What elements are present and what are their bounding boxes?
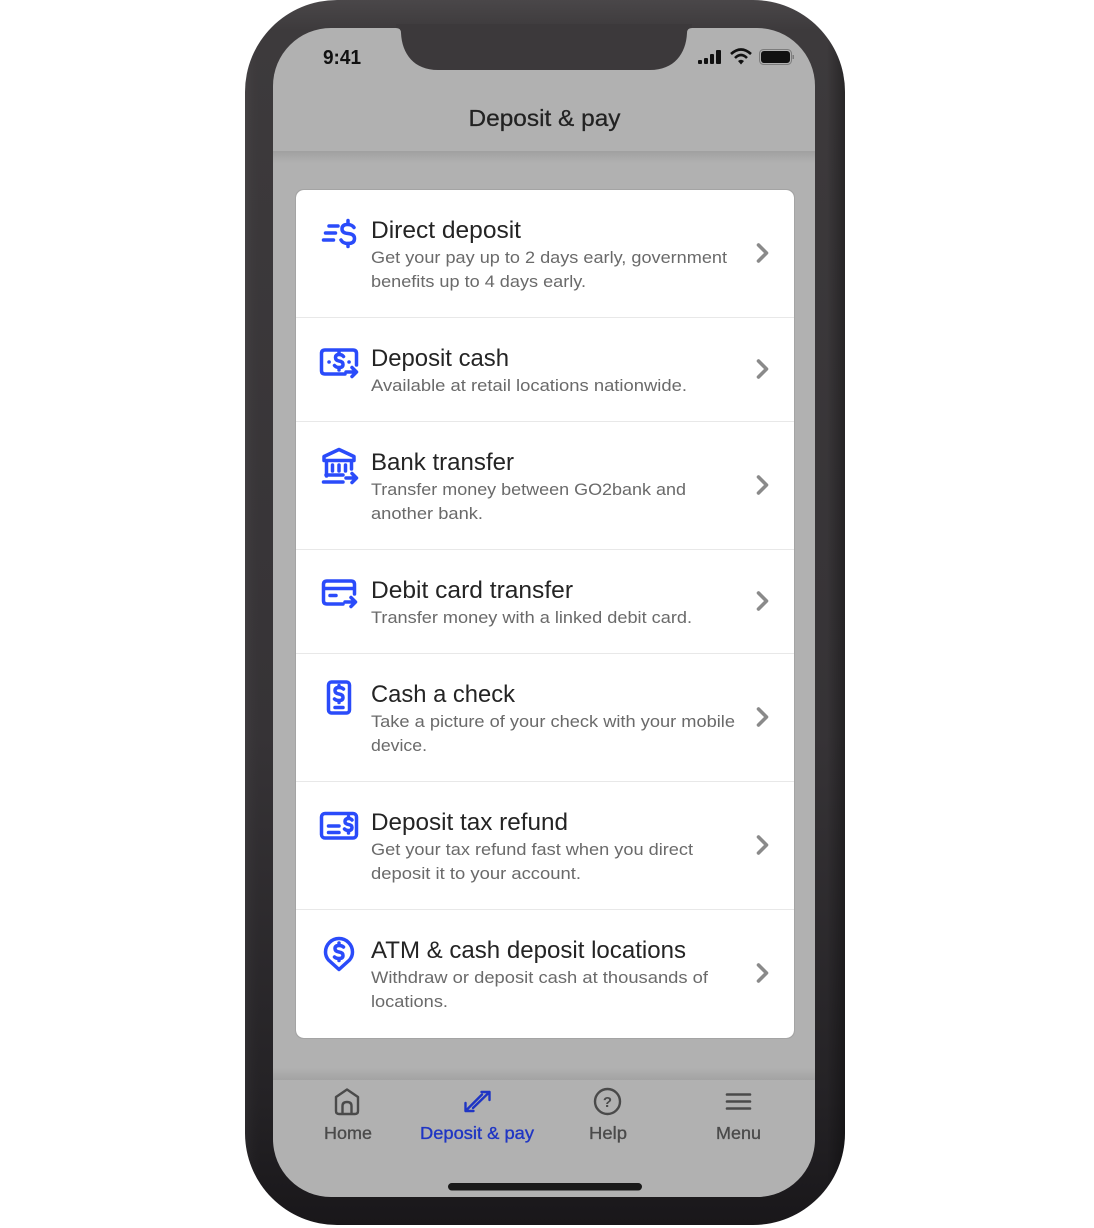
row: direct deposit: Direct deposit [371,217,521,244]
row: cash a check: device. [371,736,427,755]
panel: options card [296,190,794,1038]
row: atm locations: ATM & cash deposit locations [371,937,686,964]
nav: help [589,1089,627,1143]
nav: deposit and pay (active) [420,1092,534,1143]
chevron [758,361,766,377]
icon: phone with dollar [328,682,350,713]
phone screen [273,28,815,1197]
row: deposit tax refund: deposit it to your account. [371,864,581,883]
nav: menu: Menu [716,1123,761,1143]
row: deposit tax refund [322,809,766,883]
row: direct deposit: benefits up to 4 days early. [371,272,586,291]
status bar time: 9:41 [323,47,361,69]
row: atm locations: Withdraw or deposit cash at thousands of [371,968,708,987]
phone body [245,0,845,1225]
nav: help: ? [603,1094,612,1111]
row: debit card transfer: Transfer money with a linked debit card. [371,608,692,627]
nav: home: Home [324,1123,372,1143]
nav: deposit and pay (active): Deposit & pay [420,1123,534,1143]
row: direct deposit: Get your pay up to 2 days early, government [371,248,727,267]
row: debit card transfer [324,577,766,627]
row: deposit tax refund: Get your tax refund fast when you direct [371,840,693,859]
chevron [758,245,766,261]
icon: card with arrow [324,581,356,606]
row: deposit tax refund: Deposit tax refund [371,809,568,836]
row: deposit cash: Available at retail locations nationwide. [371,376,687,395]
chevron [758,593,766,609]
row: cash a check: Take a picture of your check with your mobile [371,712,735,731]
row: bank transfer: Transfer money between GO2bank and [371,480,686,499]
icon: location pin with dollar [326,938,352,970]
row: bank transfer: another bank. [371,504,483,523]
nav: home [324,1090,372,1143]
chevron [758,965,766,981]
status bar icons [698,50,794,64]
row: deposit cash: Deposit cash [371,345,509,372]
nav: help: Help [589,1123,627,1143]
row: cash a check [328,681,766,755]
icon: bank with arrow [324,450,356,482]
row: cash a check: Cash a check [371,681,516,708]
icon: banknote with arrow [322,350,356,376]
bottom navigation [324,1089,761,1143]
nav: menu [716,1094,761,1143]
row: debit card transfer: Debit card transfer [371,577,573,604]
notch [396,24,692,70]
home indicator [448,1183,642,1190]
title: Deposit & pay [468,105,621,131]
row: atm locations [326,937,766,1011]
row: bank transfer: Bank transfer [371,449,514,476]
row: deposit cash [322,345,766,395]
icon: dollar with speed lines [324,220,354,246]
icon: tax form with dollar [322,814,356,838]
chevron [758,837,766,853]
chevron [758,709,766,725]
chevron [758,477,766,493]
row: atm locations: locations. [371,992,448,1011]
row: bank transfer [324,449,766,523]
row: direct deposit [324,217,766,291]
